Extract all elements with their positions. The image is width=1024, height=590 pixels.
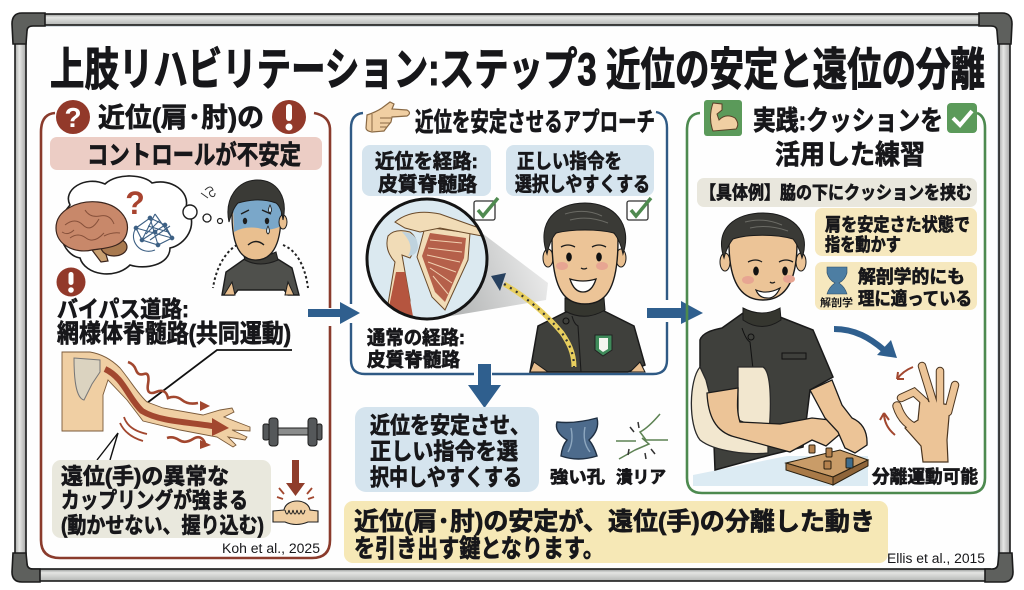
normal pathway label: [367, 327, 465, 371]
panel: middle, proximal stabilization approach: [351, 102, 667, 374]
right heading: 実践:クッションを: [753, 106, 943, 136]
coupling text box: (動かせない、握り込む): [61, 513, 264, 538]
icon: red question mark: ?: [125, 185, 145, 221]
callout: move fingers: 指を動かす: [825, 234, 901, 255]
callout: move fingers: [815, 208, 977, 256]
icon: brain: [56, 202, 127, 262]
bypass pathway label: [57, 296, 291, 348]
callout: cortical pathway: 近位を経路:: [375, 150, 478, 173]
anatomy icon label: 解剖学: [820, 296, 853, 309]
smiling therapist with cushion: [691, 213, 867, 470]
isolated movement label: 分離運動可能: [872, 467, 978, 487]
citation: Koh: Koh et al., 2025: [222, 541, 320, 556]
subheading band: コントロールが不安定: [87, 140, 301, 170]
callout: correct command: [506, 145, 654, 196]
icon: dumbbell: [263, 418, 322, 446]
coupling text box: 遠位(手)の異常な: [61, 464, 229, 489]
key message box: [344, 501, 888, 563]
icon: exclamation badge: [272, 100, 306, 134]
zoom cone: [445, 230, 548, 317]
callout: anatomy: 解剖学的にも: [858, 266, 965, 287]
panel border: [41, 113, 330, 558]
icon: fingers forming ring: [897, 366, 955, 462]
middle heading: 近位を安定させるアプローチ: [415, 107, 655, 137]
example band: 【具体例】脇の下にクッションを挟む: [700, 183, 972, 203]
left heading: 近位(肩･肘)の: [98, 103, 264, 133]
corticospinal pathway tape with arrowhead: [491, 273, 574, 367]
pegboard: [786, 445, 868, 485]
bypass pathway label: 網様体脊髄路(共同運動): [57, 320, 291, 348]
icon: pointing hand: [366, 102, 410, 132]
small rust motion arrows: [880, 367, 913, 435]
normal pathway label: 皮質脊髄路: [367, 348, 460, 371]
key message box: 近位(肩･肘)の安定が、遠位(手)の分離した動き: [354, 507, 875, 536]
arrow: middle down to summary: [468, 364, 501, 408]
summary box: stabilize proximal: 択中しやすくする: [370, 464, 522, 490]
icon: question badge: ?: [64, 102, 82, 133]
broken pathway label: 潰リア: [616, 468, 666, 487]
key message box: を引き出す鍵となります。: [354, 535, 604, 563]
shoulder anatomy lens: [367, 199, 487, 322]
leader line from label to arm: [147, 350, 292, 403]
normal pathway label: 通常の経路:: [367, 327, 465, 349]
panel border: [687, 113, 985, 493]
example band: [697, 178, 977, 207]
worried therapist: [201, 180, 308, 295]
icon: broken pathway: [616, 414, 668, 459]
icon: blue shoulder brace: [556, 418, 598, 459]
coupling text box: [52, 460, 271, 538]
icon: question badge: [56, 100, 90, 134]
icon: green check: [947, 103, 977, 133]
icon: flexed arm: [704, 100, 742, 136]
summary box: stabilize proximal: 近位を安定させ、: [370, 412, 530, 438]
coupling text box: カップリングが強まる: [61, 488, 248, 513]
thought cloud with brain and network: [56, 176, 222, 274]
curved blue arrow: [834, 329, 897, 358]
cushion under arm: [691, 367, 770, 454]
callout: correct command: 選択しやすくする: [515, 173, 650, 196]
callout: cortical pathway: 皮質脊髄路: [378, 173, 477, 196]
panel: left, unstable proximal control: [41, 100, 330, 558]
callout: move fingers: 肩を安定さた状態で: [825, 214, 970, 235]
pointer lines to coupling box: [97, 433, 118, 460]
callout: anatomy: 理に適っている: [858, 289, 972, 309]
icon: check boxes: [474, 198, 651, 220]
right heading: 活用した練習: [775, 140, 925, 170]
arrow: middle panel to right panel: [647, 301, 703, 324]
callout: correct command: 正しい指令を: [517, 150, 622, 173]
icon: hourglass: [827, 267, 847, 294]
citation: Ellis: Ellis et al., 2015: [887, 551, 985, 566]
arm diagram with reticulospinal arrows: [62, 352, 250, 449]
icon: small exclamation badge: [56, 268, 86, 296]
table surface: [693, 456, 868, 486]
panel: right, practice with cushion: [687, 100, 985, 493]
smiling therapist with badge: [530, 203, 645, 372]
icon: tangled network: [133, 214, 174, 251]
icon: down arrow with clenched fist: [273, 460, 318, 524]
callout: cortical pathway: [362, 145, 491, 196]
brace label: 強い孔: [550, 468, 605, 487]
forearm and hands: [707, 380, 867, 453]
icon: green name badge: [595, 335, 612, 356]
callout: anatomy: [815, 262, 977, 310]
panel border: [351, 112, 667, 374]
right heading: [753, 106, 943, 170]
bypass pathway label: バイパス道路:: [57, 296, 189, 322]
summary box: stabilize proximal: [355, 407, 539, 492]
summary box: stabilize proximal: 正しい指令を選: [370, 438, 518, 464]
arrow: left panel to middle panel: [308, 302, 360, 324]
